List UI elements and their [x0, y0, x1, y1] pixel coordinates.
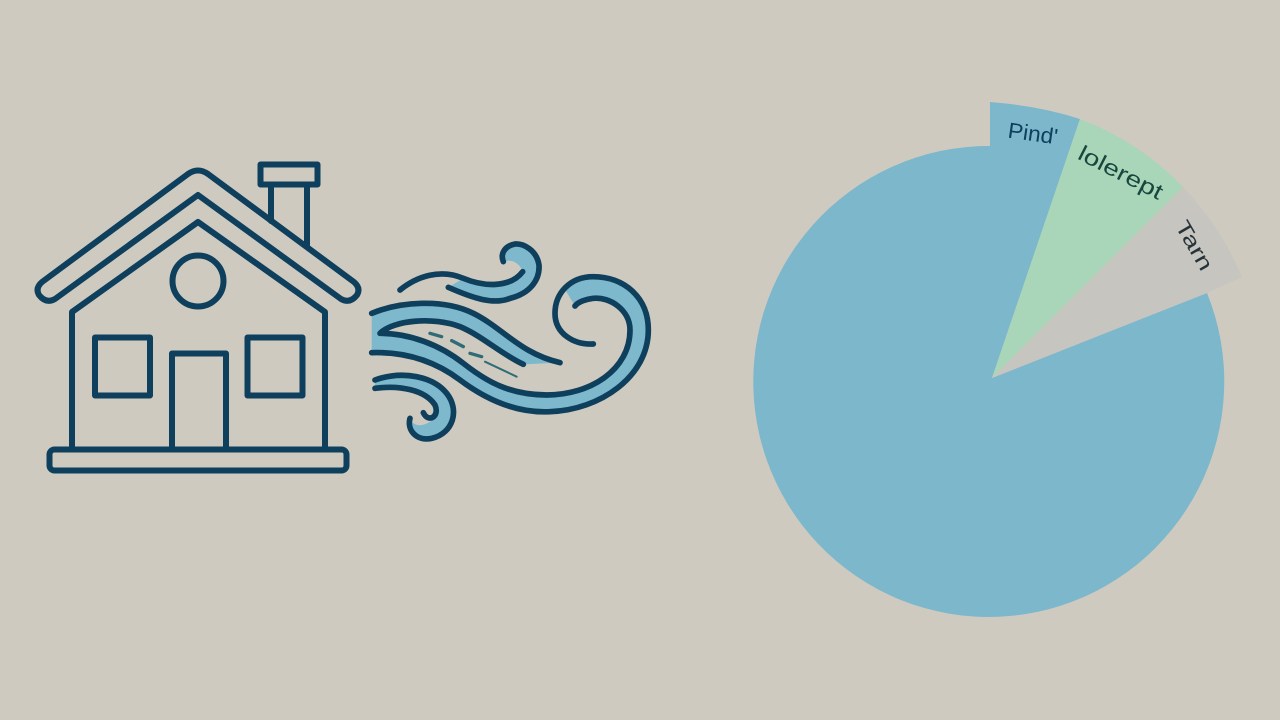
door — [172, 354, 226, 447]
right window — [248, 338, 302, 396]
house base — [50, 450, 346, 470]
left window — [95, 338, 150, 396]
label: Pind: Pind' — [1006, 118, 1059, 149]
icon: wind — [372, 244, 648, 439]
grey pie slice — [992, 187, 1242, 378]
main wind band — [372, 277, 648, 412]
house roof — [38, 170, 358, 301]
house walls — [72, 222, 325, 447]
label: Iolerept: lolerept — [1074, 140, 1167, 204]
green pie slice — [992, 119, 1183, 378]
main blue pie slice — [753, 102, 1224, 617]
round attic window — [172, 256, 224, 306]
icon: house — [38, 164, 358, 470]
house chimney — [260, 164, 318, 245]
label: Tarn: Tarn — [1170, 217, 1217, 275]
top wind wisp — [400, 244, 539, 301]
bottom wind curl — [375, 375, 454, 439]
pie chart — [753, 102, 1242, 617]
wind speed dashes — [430, 333, 517, 377]
